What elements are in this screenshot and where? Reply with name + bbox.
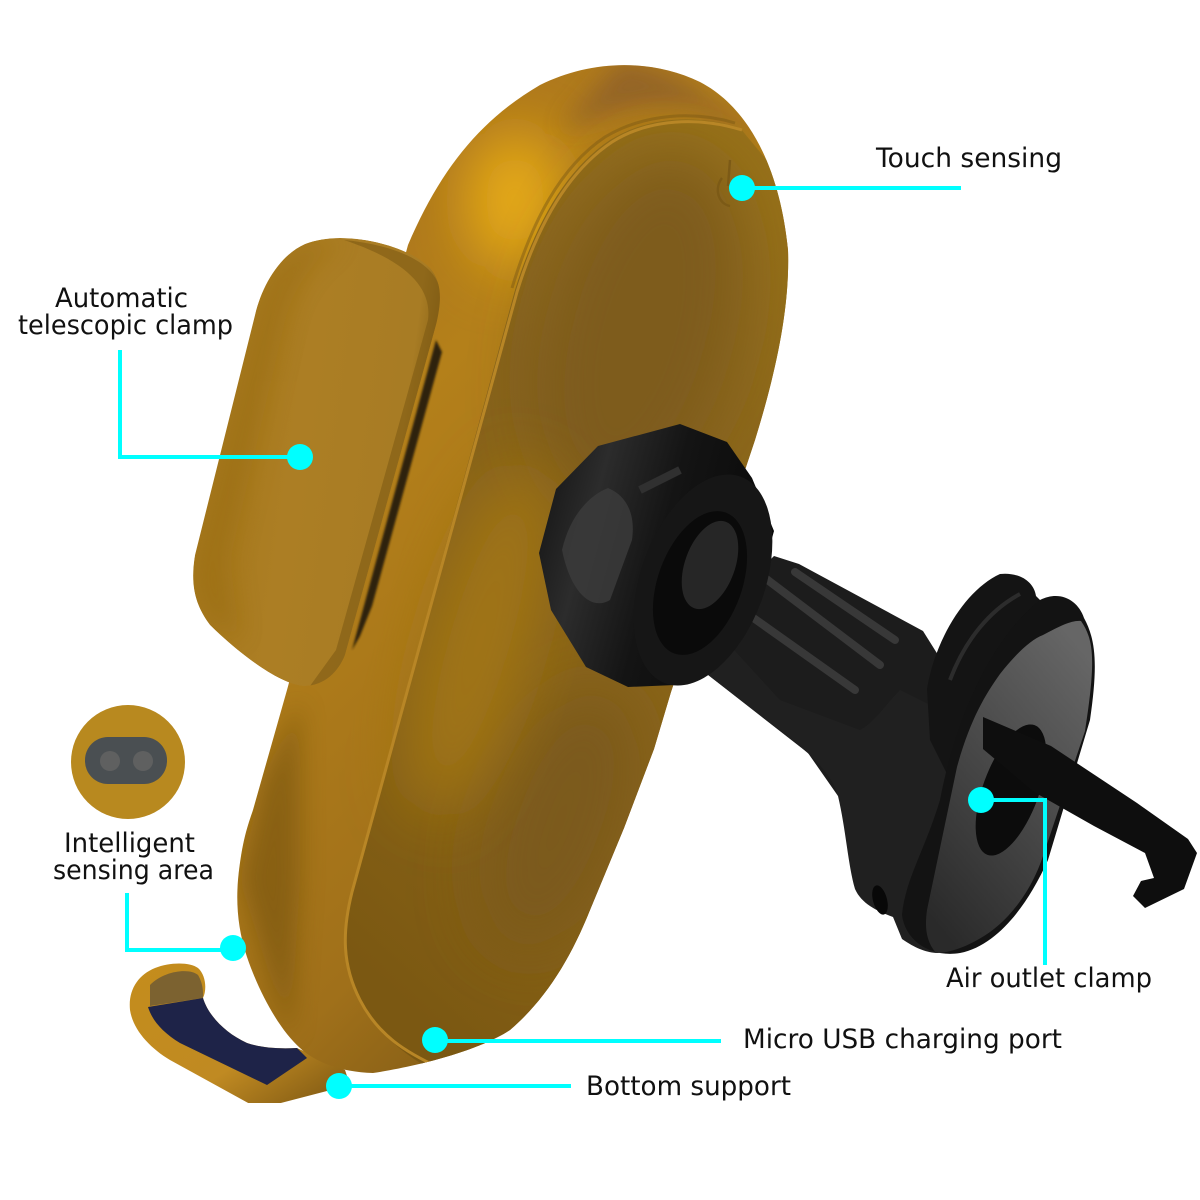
callout: micro USB charging port: [422, 1024, 1062, 1055]
sensor detail icon: [71, 705, 185, 819]
callout: bottom support: Bottom support: [586, 1071, 791, 1102]
automatic telescopic clamp arm: [193, 238, 441, 686]
wireless charger holder product: [130, 60, 820, 1104]
knob front ring: [607, 455, 799, 705]
callout: automatic telescopic clamp: Automatic: [55, 283, 188, 314]
callout: air outlet clamp: Air outlet clamp: [946, 963, 1152, 994]
callout: automatic telescopic clamp: telescopic clamp: [18, 310, 233, 341]
callout: air outlet clamp: [946, 787, 1152, 994]
front plate gray face: [926, 621, 1092, 953]
ribbed neck: [703, 556, 960, 796]
metal hook of air outlet clamp: [983, 717, 1197, 908]
rear flange: [927, 574, 1060, 800]
callout: touch sensing: [729, 143, 1062, 201]
ball joint: [671, 513, 749, 617]
rotating knob: [539, 424, 774, 687]
vent hole: [961, 716, 1061, 864]
callout: intelligent sensing area: sensing area: [53, 855, 214, 886]
air outlet mount assembly: [539, 424, 1197, 954]
touch sensing power icon: [718, 160, 730, 206]
front plate rim: [902, 596, 1095, 954]
callout: micro USB charging port: Micro USB charging port: [743, 1024, 1062, 1055]
lower arm: [703, 640, 960, 953]
callout: intelligent sensing area: [53, 828, 246, 961]
callout: touch sensing: Touch sensing: [875, 143, 1062, 174]
screw hole: [869, 884, 891, 916]
callout: intelligent sensing area: Intelligent: [64, 828, 195, 859]
front face panel: [345, 119, 820, 1080]
bottom support hook: [130, 964, 350, 1104]
callout: bottom support: [326, 1071, 791, 1102]
front panel highlight edge: [345, 122, 742, 1068]
clamp shadow gap: [352, 340, 442, 650]
back shell of the holder: [237, 65, 788, 1073]
callout: automatic telescopic clamp: [18, 283, 313, 470]
